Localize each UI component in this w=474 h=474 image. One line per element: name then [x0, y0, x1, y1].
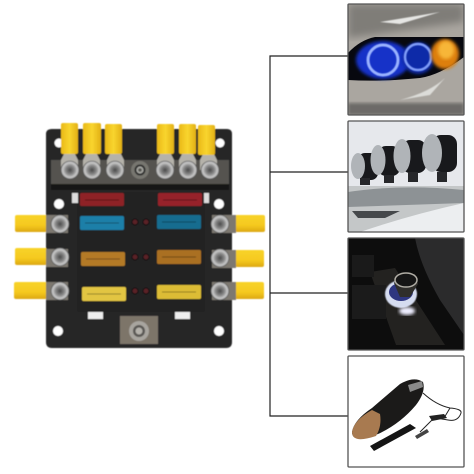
fuse cover: [77, 192, 205, 312]
panel: LED work lights: [348, 121, 464, 232]
top terminals: [61, 123, 219, 179]
brush: [370, 424, 416, 451]
bottom ground stud: [120, 316, 158, 344]
indicator LEDs: [132, 219, 149, 294]
plug: [415, 429, 429, 439]
connector lines: [270, 56, 348, 416]
panel frames: [348, 4, 464, 467]
bottom tabs: [88, 312, 103, 319]
fuse box: [14, 123, 265, 348]
housing: [46, 129, 232, 348]
top bus bar: [51, 160, 229, 184]
vacuum body: [352, 379, 424, 439]
fuses: [80, 193, 202, 301]
side mounting holes: [53, 138, 224, 336]
panel: cigarette lighter socket: [348, 238, 464, 350]
cable: [420, 393, 461, 432]
panel: handheld vacuum: [352, 379, 462, 451]
side terminals: [14, 215, 265, 300]
panel: car headlight: [348, 4, 464, 115]
